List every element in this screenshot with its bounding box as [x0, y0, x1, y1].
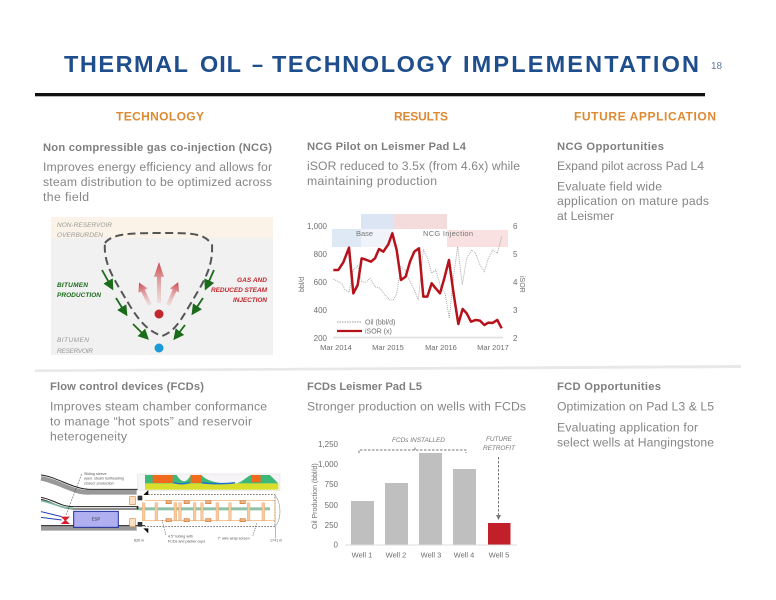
y axis: 750: [325, 480, 339, 489]
left axis: 1,000: [307, 222, 328, 231]
FCDs installed bracket: FCDs INSTALLED: [392, 437, 445, 444]
right axis: 5: [513, 250, 518, 259]
y axis: [312, 440, 339, 550]
period legend blocks: [332, 214, 508, 247]
text block: FCD opportunities: Evaluating application for: [557, 420, 698, 434]
period legend blocks: NCG Injection: [423, 229, 473, 238]
callouts: [66, 474, 82, 515]
diagram labels: OVERBURDEN: [57, 232, 103, 239]
y axis: 0: [334, 540, 339, 550]
x axis labels: Well 4: [454, 550, 474, 560]
FCD rings: [142, 503, 265, 521]
right axis: 4: [513, 278, 518, 287]
text block: NCG opportunities: [557, 141, 709, 223]
left axis: 600: [314, 278, 328, 287]
chart legend: iSOR (x): [365, 328, 392, 336]
diagram labels: BITUMEN: [57, 337, 89, 344]
x axis: Mar 2015: [372, 343, 404, 352]
diagram labels: GAS AND: [237, 277, 267, 284]
liner: [145, 495, 275, 527]
text block: NCG technology: steam distribution to be optimized across: [43, 175, 272, 189]
diagram: flow control device well completion: 7" wire wrap screen: [218, 537, 250, 541]
text block: FCD opportunities: [557, 381, 714, 450]
packers: [166, 501, 245, 522]
title: IMPLEMENTATION: [463, 51, 699, 77]
FCDs installed bracket: [359, 437, 466, 453]
y axis: 250: [325, 521, 339, 530]
text block: FCD opportunities: Optimization on Pad L3 & L5: [557, 400, 714, 414]
pump: [74, 511, 118, 527]
text block: FCD opportunities: select wells at Hangingstone: [557, 436, 714, 450]
text block: NCG technology: the field: [43, 190, 89, 204]
text block: NCG opportunities: application on mature pads: [557, 194, 709, 208]
chart legend: Oil (bbl/d): [365, 320, 395, 326]
casing: [41, 478, 137, 528]
right axis: 3: [513, 306, 518, 315]
text block: FCD opportunities: FCD Opportunities: [557, 381, 661, 393]
text block: FCD results: Stronger production on wells with FCDs: [307, 400, 526, 414]
text block: NCG opportunities: at Leismer: [557, 209, 614, 223]
y axis: Oil Production (bbl/d): [312, 463, 319, 529]
x axis labels: Well 3: [421, 550, 441, 560]
text block: FCD technology: Improves steam chamber conformance: [50, 400, 267, 414]
x axis labels: [352, 550, 509, 560]
title: OIL: [200, 51, 241, 77]
x axis labels: Well 1: [352, 550, 372, 560]
diagram: flow control device well completion: closed: production: [84, 481, 114, 485]
chart legend: [337, 320, 395, 336]
future retrofit callout: RETROFIT: [483, 445, 516, 452]
title: –: [252, 51, 263, 77]
text block: NCG opportunities: NCG Opportunities: [557, 141, 664, 153]
diagram: flow control device well completion: 4.5" tubing with: [168, 535, 193, 539]
text block: NCG opportunities: Expand pilot across Pad L4: [557, 159, 704, 173]
diagram: flow control device well completion: ESP: [92, 517, 100, 522]
diagram labels: INJECTION: [233, 297, 267, 304]
diagram labels: NON-RESERVOIR: [57, 222, 112, 229]
y axis: 500: [325, 501, 339, 510]
left axis: 200: [314, 334, 328, 343]
diagram: flow control device well completion: FCDs and packer cups: [168, 539, 205, 543]
iSOR series: [333, 233, 502, 328]
diagram: flow control device well completion: 1741 m: [270, 538, 282, 542]
diagram labels: [57, 222, 268, 355]
diagram labels: BITUMEN: [57, 282, 88, 289]
left axis: 400: [314, 306, 328, 315]
diagram: steam chamber NCG injection: [51, 217, 273, 355]
heading: results: RESULTS: [394, 110, 448, 124]
left axis: [299, 222, 328, 343]
future well bar: [488, 523, 510, 545]
right axis: [513, 222, 525, 343]
bar chart: oil production by well: [312, 436, 517, 560]
diagram labels: RESERVOIR: [57, 348, 93, 355]
title: TECHNOLOGY: [272, 51, 452, 77]
x axis: Mar 2014: [320, 343, 352, 352]
text block: FCD technology: [50, 381, 267, 444]
text block: NCG results: maintaining production: [307, 174, 437, 188]
text block: FCD results: FCDs Leismer Pad L5: [307, 381, 422, 393]
chamber outline: [105, 233, 212, 336]
oil series: [333, 237, 502, 318]
title: THERMAL: [64, 51, 188, 77]
future retrofit callout: [483, 436, 516, 518]
tubing lines: [41, 501, 73, 508]
diagram labels: REDUCED STEAM: [211, 287, 268, 294]
x axis: Mar 2016: [425, 343, 457, 352]
heading: technology: TECHNOLOGY: [116, 110, 204, 124]
x axis labels: Well 2: [386, 550, 406, 560]
text block: NCG results: [307, 141, 520, 188]
bars: [351, 453, 510, 545]
left axis: bbl/d: [299, 277, 306, 292]
diagram labels: PRODUCTION: [57, 292, 101, 299]
sliding sleeve: [61, 517, 70, 524]
x axis: Mar 2017: [477, 343, 509, 352]
x axis: [320, 338, 509, 352]
green production arrows: [102, 270, 214, 338]
injector and producer wells: [154, 310, 164, 318]
right axis: iSOR: [518, 276, 525, 293]
heading: future application: FUTURE APPLICATION: [574, 110, 716, 124]
left axis: 800: [314, 250, 328, 259]
diagram: flow control device well completion: 826 m: [134, 538, 144, 542]
text block: NCG opportunities: Evaluate field wide: [557, 180, 662, 194]
y axis: 1,000: [318, 460, 339, 469]
diagram: flow control device well completion: open: steam bullheading: [84, 477, 124, 481]
red steam arrows: [135, 262, 183, 307]
period legend blocks: Base: [356, 229, 373, 238]
section divider: [35, 365, 741, 372]
text block: FCD results: [307, 381, 526, 414]
text block: NCG results: iSOR reduced to 3.5x (from 4.6x) while: [307, 159, 520, 173]
future retrofit callout: FUTURE: [486, 436, 513, 443]
right axis: 6: [513, 222, 518, 231]
temperature profile: [138, 474, 280, 490]
header rule: [35, 93, 705, 96]
title: [64, 51, 699, 77]
text block: NCG technology: Improves energy efficiency and allows for: [43, 160, 272, 174]
hangers: [130, 497, 135, 527]
diagram: flow control device well completion: [41, 472, 282, 543]
y axis: 1,250: [318, 440, 339, 449]
x axis labels: Well 5: [489, 550, 509, 560]
page number: 18: [711, 61, 722, 72]
diagram: flow control device well completion: Sliding sleeve: [84, 472, 107, 476]
text block: NCG technology: Non compressible gas co-injection (NCG): [43, 142, 272, 154]
text block: FCD technology: to manage “hot spots” and reservoir: [50, 414, 252, 428]
line chart: oil and iSOR: [299, 214, 525, 352]
right axis: 2: [513, 334, 518, 343]
text block: NCG technology: [43, 142, 272, 204]
text block: FCD technology: heterogeneity: [50, 430, 128, 444]
text block: NCG results: NCG Pilot on Leismer Pad L4: [307, 141, 467, 153]
text block: FCD technology: Flow control devices (FCDs): [50, 381, 204, 393]
